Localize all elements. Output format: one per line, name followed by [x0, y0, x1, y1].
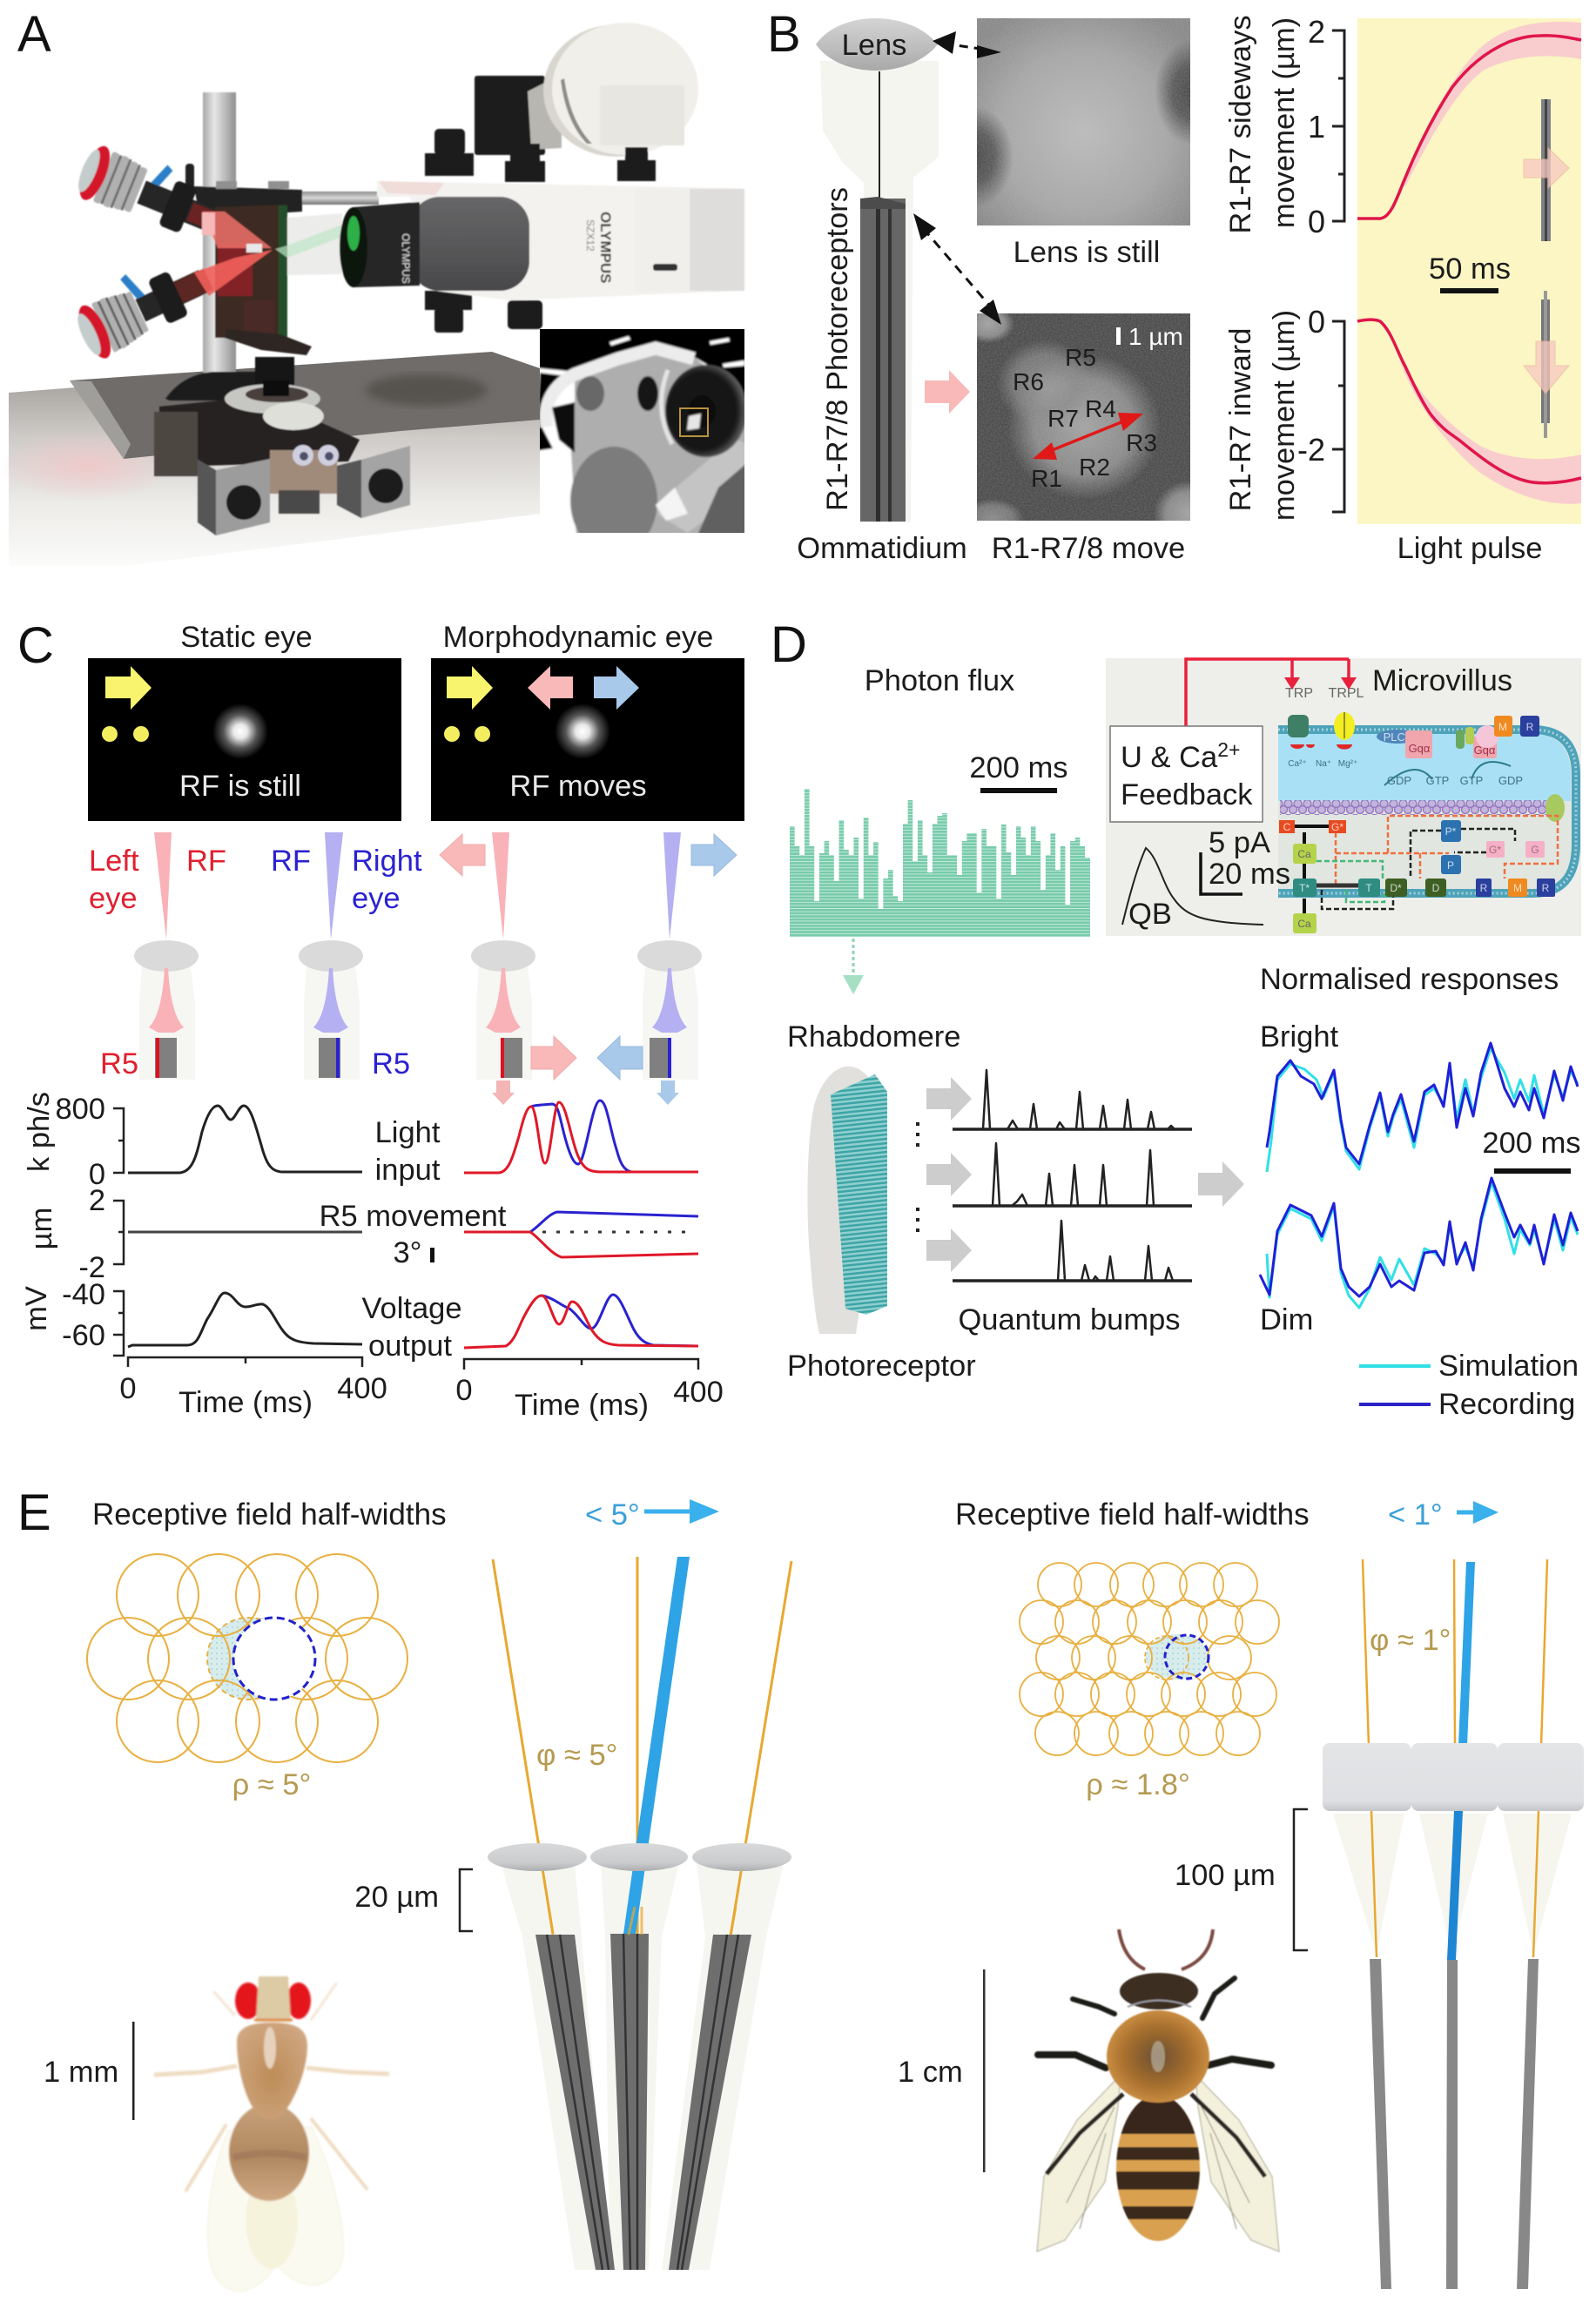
signalling state boxes: Ca [1297, 848, 1311, 860]
quantum bump curve [1122, 848, 1263, 931]
objective lens [340, 197, 529, 291]
movement arrows around morphodynamic ommatidia [440, 834, 737, 1105]
caption: light pulse: Light pulse [1397, 532, 1542, 565]
signalling arrows [1295, 762, 1558, 914]
heading: receptive field half-widths, fly: Receptive field half-widths [92, 1498, 447, 1531]
bee illustration [1037, 1929, 1279, 2252]
caption: lens is still: Lens is still [1013, 236, 1160, 269]
rhabdom dark core lines [547, 1934, 738, 2270]
lens [816, 18, 938, 71]
heading: microvillus: Microvillus [1372, 664, 1512, 697]
middle labels: R5 movement [320, 1200, 507, 1233]
label: dim: Dim [1260, 1303, 1313, 1336]
eye labels: Left [89, 845, 139, 878]
scale bars 5 pA and 20 ms: 20 ms [1209, 858, 1290, 891]
blue moving axis [1458, 1562, 1475, 1746]
caption: photoreceptor: Photoreceptor [787, 1350, 976, 1383]
fly ommatidia [488, 1557, 791, 2270]
thorax [237, 2023, 307, 2119]
label rho bee: ρ ≈ 1.8° [1086, 1768, 1190, 1801]
scale 100 micron [1175, 1809, 1308, 1950]
electronics board with red light beams [194, 205, 342, 338]
camera knobs [425, 129, 656, 333]
signalling state boxes: D [1432, 882, 1440, 894]
G protein complex: Gqα [1409, 742, 1431, 755]
channels [1285, 686, 1364, 769]
left plots: light, movement, voltage axes: 0 [89, 1158, 105, 1191]
right plots: axis [455, 1359, 724, 1422]
sideways traces [1357, 22, 1581, 219]
micrograph: photoreceptors [977, 313, 1190, 521]
wings [1037, 2075, 1121, 2252]
ellipsis dots [916, 1122, 919, 1239]
legs [1038, 1978, 1271, 2068]
signalling state boxes: R [1480, 882, 1488, 894]
signalling state boxes: M [1498, 721, 1507, 733]
panel D: phototransduction model [771, 616, 1581, 1421]
right traces: red [464, 1102, 698, 1348]
cell labels: R3 [1126, 429, 1157, 456]
right plots: axis: 0 [455, 1374, 473, 1407]
G protein complex: GDP [1387, 774, 1411, 787]
pale crystalline cones [1333, 1814, 1572, 1954]
wings [208, 2131, 292, 2291]
eye labels: eye [89, 882, 138, 915]
channels: TRPL [1329, 686, 1364, 701]
signalling state boxes: M [1513, 882, 1522, 894]
inward movement y label: R1-R7 inward [1224, 328, 1257, 511]
scale 1 cm: 1 cm [898, 2056, 963, 2089]
head [1120, 1973, 1198, 2009]
abdomen with stripes [1115, 2100, 1202, 2242]
rhabdomere illustration [807, 1067, 887, 1334]
horizontal rod [302, 192, 379, 205]
cell labels: R1 [1031, 465, 1062, 492]
heading: rhabdomere: Rhabdomere [787, 1020, 960, 1054]
panel letter A: A [17, 6, 51, 63]
caption: ommatidium: Ommatidium [797, 532, 967, 565]
eye labels: RF [186, 845, 226, 878]
lower axis [1297, 304, 1344, 512]
lenses [488, 1843, 791, 1871]
left plots: light, movement, voltage axes: -40 [62, 1278, 105, 1311]
movement chart on yellow background [1297, 14, 1581, 524]
R5 labels [100, 1047, 410, 1080]
right plots: axis: 400 [673, 1376, 724, 1409]
legend: Recording [1438, 1388, 1575, 1421]
bee receptive field lattice [1020, 1563, 1279, 1755]
signalling state boxes: G [1531, 844, 1539, 856]
lower LED lamp [66, 244, 220, 363]
upper LED lamp [72, 136, 232, 250]
legend: Simulation [1438, 1350, 1579, 1383]
upper axis: 1 [1308, 109, 1325, 145]
wing veins [1067, 2107, 1249, 2229]
left plots: light, movement, voltage axes: 2 [89, 1184, 105, 1217]
left plots: light, movement, voltage axes: mV [20, 1286, 53, 1331]
rod with sideways arrow [1524, 99, 1569, 241]
middle labels: input [375, 1154, 441, 1187]
upper axis: 2 [1308, 14, 1325, 50]
middle labels: output [368, 1330, 452, 1363]
ommatidium 3: left morphodynamic [471, 832, 535, 1080]
left plots: light, movement, voltage axes: µm [25, 1208, 58, 1249]
middle labels: Voltage [361, 1292, 462, 1325]
grey rhabdoms [535, 1934, 751, 2270]
micrograph: lens [977, 18, 1190, 226]
scale bars 5 pA and 20 ms [1201, 826, 1290, 894]
left plots: light, movement, voltage axes: -2 [78, 1251, 105, 1284]
inset: fly head photo [540, 329, 744, 533]
heading: morphodynamic eye: Morphodynamic eye [443, 621, 713, 654]
middle labels [320, 1116, 507, 1363]
lower axis: -2 [1297, 432, 1325, 468]
forewing dark margins [1047, 2094, 1265, 2177]
eye labels: eye [352, 882, 401, 915]
scale 100 micron: 100 µm [1175, 1859, 1276, 1892]
sideways movement y label [1224, 15, 1301, 234]
label rho fly: ρ ≈ 5° [232, 1768, 311, 1801]
thorax [1107, 2010, 1209, 2103]
inward traces [1357, 320, 1581, 504]
left plots: light, movement, voltage axes: 800 [55, 1093, 105, 1126]
drift label bee: < 1° [1388, 1498, 1443, 1531]
feedback box: U & Ca [1121, 741, 1217, 774]
panel letter E: E [17, 1484, 51, 1541]
signalling state boxes: P [1447, 859, 1454, 872]
channels: Ca²⁺ [1288, 759, 1307, 769]
orange axes [1363, 1559, 1547, 1957]
cylindrical corneal lenses [1323, 1743, 1584, 1811]
microvillus panel [1106, 658, 1581, 936]
left plots: light, movement, voltage axes: 0 [119, 1372, 137, 1405]
upper axis: 0 [1308, 204, 1325, 239]
eye labels [89, 845, 422, 915]
scale bar 200 ms: 200 ms [1482, 1127, 1581, 1160]
quantum bump traces [953, 1070, 1192, 1281]
signalling state boxes: P* [1445, 825, 1457, 838]
drift label bee [1388, 1498, 1498, 1531]
caption: R1-R7/8 move: R1-R7/8 move [992, 532, 1185, 565]
cell labels [1013, 344, 1157, 492]
label: bright: Bright [1260, 1020, 1339, 1054]
inward movement y label: movement (µm) [1268, 310, 1301, 521]
pink movement arrow [925, 370, 970, 414]
panel C: static vs morphodynamic eye [17, 617, 744, 1422]
panel E: fly and bee optics [17, 1484, 1584, 2291]
orange axes [493, 1557, 791, 1936]
G protein complex: GTP [1426, 774, 1449, 787]
arrow: photoreceptors to rhabdomere image [913, 213, 1001, 325]
grey rhabdoms [1370, 1959, 1539, 2289]
eye labels: Right [352, 845, 422, 878]
cell labels: R2 [1079, 454, 1110, 481]
cell labels: R4 [1085, 395, 1116, 422]
microscope body: OLYMPUS [597, 212, 614, 284]
sideways movement y label: R1-R7 sideways [1224, 15, 1257, 234]
G protein complex: PLCβ [1384, 730, 1411, 744]
left plots: light, movement, voltage axes: 400 [337, 1372, 387, 1405]
drift label fly [585, 1498, 719, 1531]
channels: TRP [1285, 686, 1313, 701]
lower axis: 0 [1308, 304, 1325, 340]
signalling state boxes: T* [1299, 882, 1310, 894]
right traces: blue [530, 1101, 698, 1346]
eyes [235, 1983, 261, 2019]
heading: static eye: Static eye [180, 621, 313, 654]
camera: white cylinder and black box [475, 23, 698, 157]
arrow: lens to lens image [933, 31, 1001, 58]
feedback box [1110, 726, 1263, 822]
scale bar 1 micron: 1 µm [1128, 323, 1183, 350]
pale pigment shading [501, 1863, 784, 2270]
rod with inward arrow [1524, 291, 1569, 438]
cell compartment [1278, 730, 1578, 895]
heading: normalised responses: Normalised responses [1260, 963, 1559, 996]
antennae [1119, 1929, 1213, 1969]
black panel: RF moves: RF moves [509, 770, 647, 803]
R5 labels: R5 [372, 1047, 410, 1080]
red movement arrow [1033, 413, 1143, 460]
heading: photon flux: Photon flux [865, 664, 1014, 697]
legs [154, 1983, 389, 2191]
dim response traces [1260, 1178, 1578, 1308]
eye labels: RF [271, 845, 311, 878]
G protein complex: Gqα [1474, 744, 1496, 757]
bee ommatidia [1323, 1559, 1584, 2289]
blue moving axis [623, 1557, 690, 1934]
signalling state boxes: R [1526, 721, 1534, 733]
scale bar 200 ms: 200 ms [969, 751, 1068, 784]
cell labels: R5 [1065, 344, 1096, 371]
ommatidium 2: right static [299, 832, 363, 1080]
head [256, 1976, 291, 2022]
scale 20 micron: 20 µm [354, 1881, 439, 1914]
scale bars 5 pA and 20 ms: 5 pA [1209, 826, 1270, 859]
scale 1 mm [44, 2022, 134, 2120]
bright response traces [1267, 1043, 1578, 1172]
sideways movement y label: movement (µm) [1268, 17, 1301, 228]
table surface [0, 383, 540, 566]
label phi fly: φ ≈ 5° [536, 1739, 617, 1772]
panel A: microscope setup [0, 6, 749, 566]
label phi bee: φ ≈ 1° [1370, 1624, 1451, 1657]
left traces [128, 1106, 362, 1347]
microscope body [377, 181, 744, 300]
caption: quantum bumps: Quantum bumps [958, 1303, 1181, 1336]
panel letter B: B [767, 6, 801, 63]
cell labels: R7 [1047, 405, 1079, 432]
feedback box: 2+ [1217, 738, 1240, 761]
quantum bump curve: QB [1128, 898, 1172, 931]
signalling state boxes: C [1283, 821, 1291, 833]
middle labels: Light [375, 1116, 441, 1149]
illustration body with soft focus [66, 23, 744, 535]
panel letter D: D [771, 616, 807, 673]
right plots: axis: Time (ms) [515, 1389, 649, 1422]
stage arm and objective holder [225, 329, 312, 398]
upper axis [1308, 14, 1344, 239]
signalling state boxes: G* [1331, 821, 1343, 833]
photon flux bars [790, 789, 1090, 937]
R5 labels: R5 [100, 1047, 138, 1080]
pale coupling tube [287, 213, 342, 275]
magnet blocks and eyeball markers [198, 445, 410, 535]
fly receptive field lattice [87, 1554, 407, 1762]
scale 1 mm: 1 mm [44, 2056, 118, 2089]
panel letter C: C [17, 617, 54, 674]
black panel: RF is still: RF is still [179, 770, 301, 803]
big gray arrow to responses [1198, 1161, 1244, 1207]
signalling state boxes: Ca [1297, 918, 1311, 930]
drift label fly: < 5° [585, 1498, 640, 1531]
signalling state boxes: G* [1489, 844, 1501, 856]
photoreceptor axis label: R1-R7/8 Photoreceptors [821, 187, 854, 511]
green dashed arrow to rhabdomere [843, 939, 864, 994]
rotary stage base [154, 372, 360, 514]
black panel: RF is still [88, 658, 401, 821]
heading: receptive field half-widths, bee: Receptive field half-widths [955, 1498, 1310, 1531]
black arm [185, 164, 302, 214]
gray arrows to bump traces [926, 1077, 972, 1272]
ommatidium schematic: Lens [842, 29, 906, 62]
legend [1359, 1350, 1579, 1421]
G protein complex [1377, 725, 1523, 787]
cell labels: R6 [1013, 368, 1044, 395]
feedback box: Feedback [1121, 778, 1253, 811]
signalling state boxes: R [1542, 882, 1550, 894]
zero line dots [542, 1231, 689, 1233]
dark base plate [70, 352, 540, 459]
red feedback lines [1186, 659, 1357, 726]
G protein complex: GDP [1498, 774, 1523, 787]
ommatidium 1: left static [134, 832, 199, 1080]
abdomen [229, 2104, 309, 2201]
objective lens: OLYMPUS [400, 233, 412, 284]
fly illustration [154, 1976, 389, 2291]
signalling state boxes: D* [1390, 882, 1402, 894]
scale bar 50 ms: 50 ms [1429, 252, 1511, 286]
signalling state boxes: T [1365, 882, 1372, 894]
left plots: light, movement, voltage axes: k ph/s [23, 1092, 56, 1172]
inward movement y label [1224, 310, 1301, 521]
ommatidium schematic [816, 18, 939, 522]
left plots: light, movement, voltage axes: -60 [62, 1319, 105, 1352]
black panel: RF moves [431, 658, 744, 821]
middle labels: 3° [394, 1236, 421, 1269]
G protein complex: GTP [1460, 774, 1483, 787]
scale 20 micron [354, 1869, 473, 1931]
channels: Na⁺ [1316, 759, 1331, 769]
left plots: light, movement, voltage axes [20, 1092, 387, 1419]
signalling state boxes [1279, 716, 1555, 933]
ommatidium 4: right morphodynamic [637, 832, 702, 1080]
actin filament [1280, 794, 1565, 822]
left plots: light, movement, voltage axes: Time (ms) [178, 1386, 313, 1419]
panel B: ommatidium and photoreceptor movement [767, 6, 1581, 565]
channels: Mg²⁺ [1338, 759, 1357, 769]
microscope body: SZX12 [584, 219, 596, 252]
vertical post [203, 92, 236, 373]
